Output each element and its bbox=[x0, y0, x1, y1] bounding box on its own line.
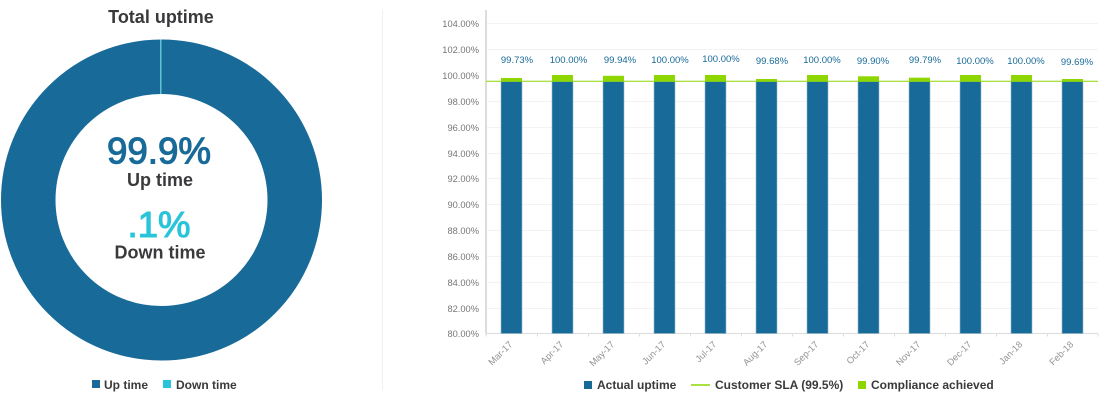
y axis labels: 100.00% bbox=[442, 71, 479, 81]
compliance achieved bars bbox=[501, 75, 1083, 82]
y axis labels: 90.00% bbox=[447, 200, 479, 210]
panel: total uptime donut bbox=[28, 7, 295, 392]
bar value labels: 99.79% bbox=[909, 55, 942, 66]
axes bbox=[486, 10, 1098, 336]
bar value labels: 100.00% bbox=[550, 55, 588, 66]
bar value labels: 99.90% bbox=[857, 56, 890, 67]
donut chart bbox=[28, 40, 295, 333]
bar value labels: 100.00% bbox=[651, 55, 689, 66]
bar value labels bbox=[501, 54, 1094, 68]
y axis labels: 104.00% bbox=[442, 19, 479, 29]
x axis labels: Jan-18 bbox=[997, 339, 1024, 367]
stat: up time: 99.9% bbox=[107, 130, 211, 172]
chart legend: Customer SLA (99.5%) bbox=[715, 378, 843, 392]
x axis labels: Aug-17 bbox=[741, 339, 769, 368]
y axis labels: 84.00% bbox=[447, 278, 479, 288]
x axis labels: Feb-18 bbox=[1048, 339, 1075, 367]
bar value labels: 99.73% bbox=[501, 55, 534, 66]
x axis labels bbox=[487, 339, 1075, 368]
x axis labels: Dec-17 bbox=[945, 339, 973, 368]
y axis labels: 94.00% bbox=[447, 149, 479, 159]
chart legend bbox=[584, 378, 994, 392]
y axis labels: 86.00% bbox=[447, 252, 479, 262]
panel: monthly uptime chart bbox=[442, 10, 1098, 392]
donut legend: Up time bbox=[104, 378, 148, 392]
x axis labels: Jul-17 bbox=[693, 339, 718, 364]
x axis labels: Nov-17 bbox=[894, 339, 922, 368]
x axis labels: Mar-17 bbox=[487, 339, 514, 367]
stat: down time: Down time bbox=[114, 242, 206, 262]
y axis labels: 102.00% bbox=[442, 45, 479, 55]
y axis labels: 92.00% bbox=[447, 174, 479, 184]
customer SLA line bbox=[486, 80, 1098, 82]
x axis labels: Apr-17 bbox=[539, 339, 565, 366]
y axis labels: 88.00% bbox=[447, 226, 479, 236]
x axis labels: Oct-17 bbox=[845, 339, 871, 366]
donut legend bbox=[92, 378, 237, 392]
chart legend: Compliance achieved bbox=[871, 378, 994, 392]
y axis labels: 80.00% bbox=[447, 329, 479, 339]
actual uptime bars bbox=[501, 82, 1083, 334]
heading: total uptime: Total uptime bbox=[108, 7, 214, 27]
donut legend: Down time bbox=[176, 378, 237, 392]
bar value labels: 99.69% bbox=[1061, 57, 1094, 68]
y axis labels: 82.00% bbox=[447, 304, 479, 314]
bar value labels: 100.00% bbox=[803, 55, 841, 66]
bar value labels: 99.68% bbox=[756, 56, 789, 67]
y axis labels bbox=[442, 19, 479, 339]
x axis labels: Jun-17 bbox=[640, 339, 667, 367]
stat: down time bbox=[114, 204, 206, 262]
bar value labels: 99.94% bbox=[604, 55, 637, 66]
x axis labels: May-17 bbox=[587, 339, 616, 368]
y axis labels: 98.00% bbox=[447, 97, 479, 107]
bar value labels: 100.00% bbox=[956, 56, 994, 67]
stat: up time bbox=[107, 130, 211, 190]
stat: down time: .1% bbox=[128, 204, 190, 245]
chart legend: Actual uptime bbox=[597, 378, 677, 392]
x axis labels: Sep-17 bbox=[792, 339, 820, 368]
stat: up time: Up time bbox=[127, 170, 193, 190]
bar value labels: 100.00% bbox=[1007, 56, 1045, 67]
bar value labels: 100.00% bbox=[702, 54, 740, 65]
y axis labels: 96.00% bbox=[447, 123, 479, 133]
